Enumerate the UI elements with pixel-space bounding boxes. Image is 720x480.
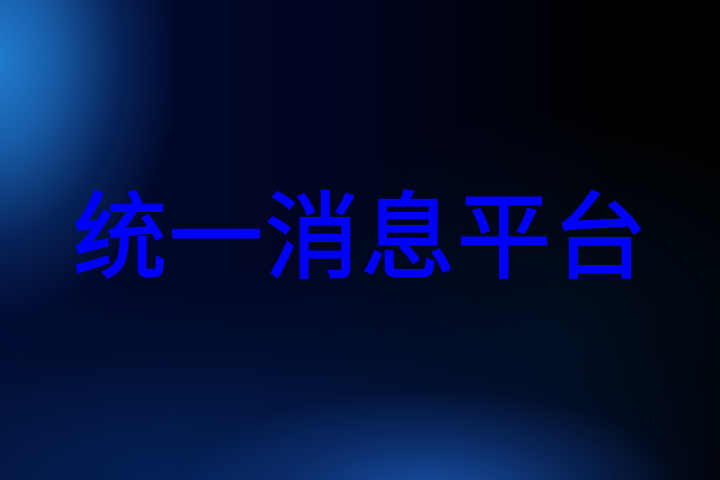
title: 统一消息平台	[73, 185, 649, 290]
